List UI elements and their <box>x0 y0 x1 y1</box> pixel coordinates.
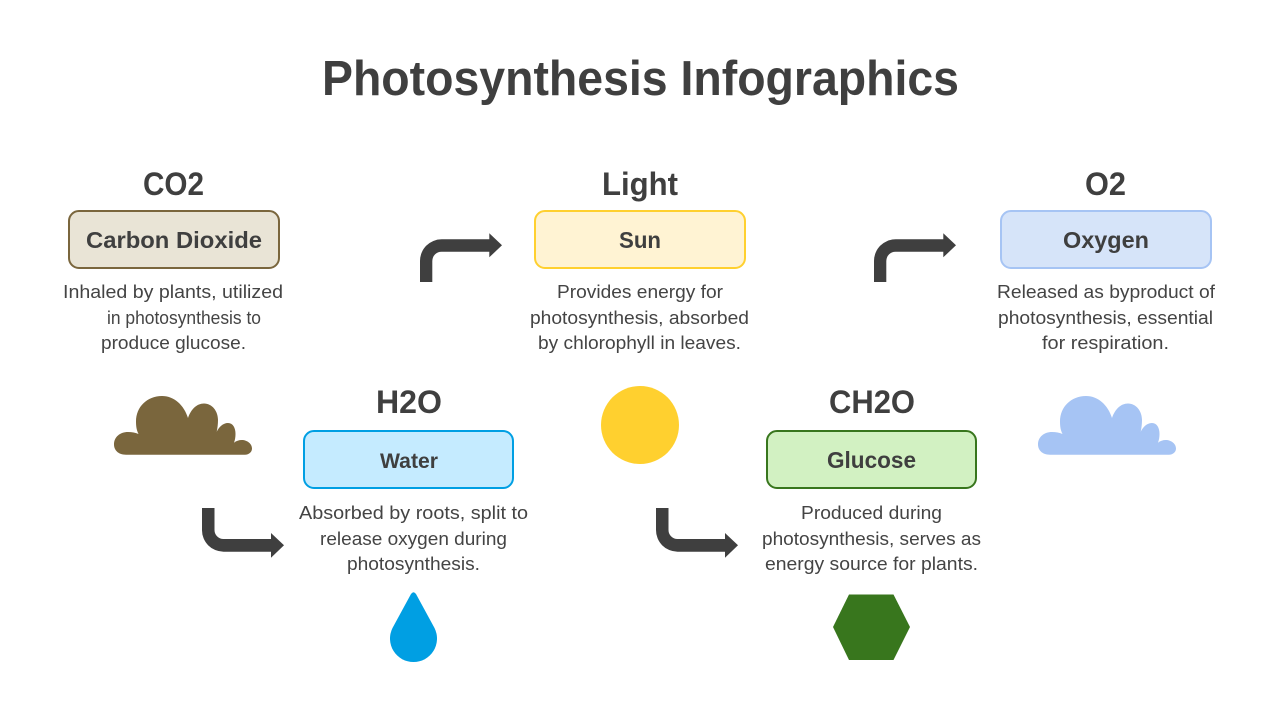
text: CO2 description <box>63 281 283 353</box>
label box: Oxygen <box>1001 211 1211 268</box>
arrow: glucose to oxygen <box>874 233 956 282</box>
label box: Water <box>304 431 513 488</box>
title: Photosynthesis Infographics <box>322 52 959 106</box>
panel: CH2O <box>762 384 981 660</box>
arrow: light to glucose <box>656 508 738 558</box>
icon: blue cloud <box>1038 396 1176 455</box>
arrow: CO2 to water <box>202 508 284 558</box>
text: CH2O description: energy source for plants. <box>765 553 978 574</box>
text: CH2O description <box>762 502 981 574</box>
text: H2O description: Absorbed by roots, split to <box>299 502 528 523</box>
label box: Water: Water <box>380 450 438 473</box>
text: O2 description: photosynthesis, essential <box>998 307 1213 328</box>
text: Light description: Provides energy for <box>557 281 723 302</box>
label box: Carbon Dioxide: Carbon Dioxide <box>86 227 262 253</box>
text: CH2O description: photosynthesis, serves as <box>762 528 981 549</box>
text: O2 description <box>997 281 1216 353</box>
text: CH2O description: Produced during <box>801 502 942 523</box>
panel: CO2 <box>63 166 283 455</box>
arrow: water to light <box>420 233 502 282</box>
text: Light description: photosynthesis, absorbed <box>530 307 749 328</box>
heading: O2: O2 <box>1085 166 1126 202</box>
text: H2O description: photosynthesis. <box>347 553 480 574</box>
text: O2 description: for respiration. <box>1042 332 1169 353</box>
label box: Glucose: Glucose <box>827 447 916 473</box>
heading: Light: Light <box>602 166 678 202</box>
label box: Oxygen: Oxygen <box>1063 227 1149 253</box>
text: CO2 description: in photosynthesis to <box>107 307 261 328</box>
text: Light description: by chlorophyll in leaves. <box>538 332 741 353</box>
text: Light description <box>530 281 749 353</box>
panel: Light <box>530 166 749 464</box>
panel: H2O <box>299 384 528 662</box>
heading: H2O: H2O <box>376 384 442 420</box>
label box: Carbon Dioxide <box>69 211 279 268</box>
label box: Sun <box>535 211 745 268</box>
heading: CO2: CO2 <box>143 166 204 202</box>
icon: brown cloud <box>114 396 252 455</box>
panel: O2 <box>997 166 1216 455</box>
text: CO2 description: Inhaled by plants, utilized <box>63 281 283 302</box>
icon: sun <box>601 386 679 464</box>
icon: water drop <box>390 592 437 662</box>
label box: Glucose <box>767 431 976 488</box>
heading: CH2O: CH2O <box>829 384 915 420</box>
text: H2O description: release oxygen during <box>320 528 507 549</box>
text: H2O description <box>299 502 528 574</box>
icon: glucose hexagon <box>833 594 910 660</box>
label box: Sun: Sun <box>619 227 661 253</box>
text: CO2 description: produce glucose. <box>101 332 246 353</box>
text: O2 description: Released as byproduct of <box>997 281 1216 302</box>
